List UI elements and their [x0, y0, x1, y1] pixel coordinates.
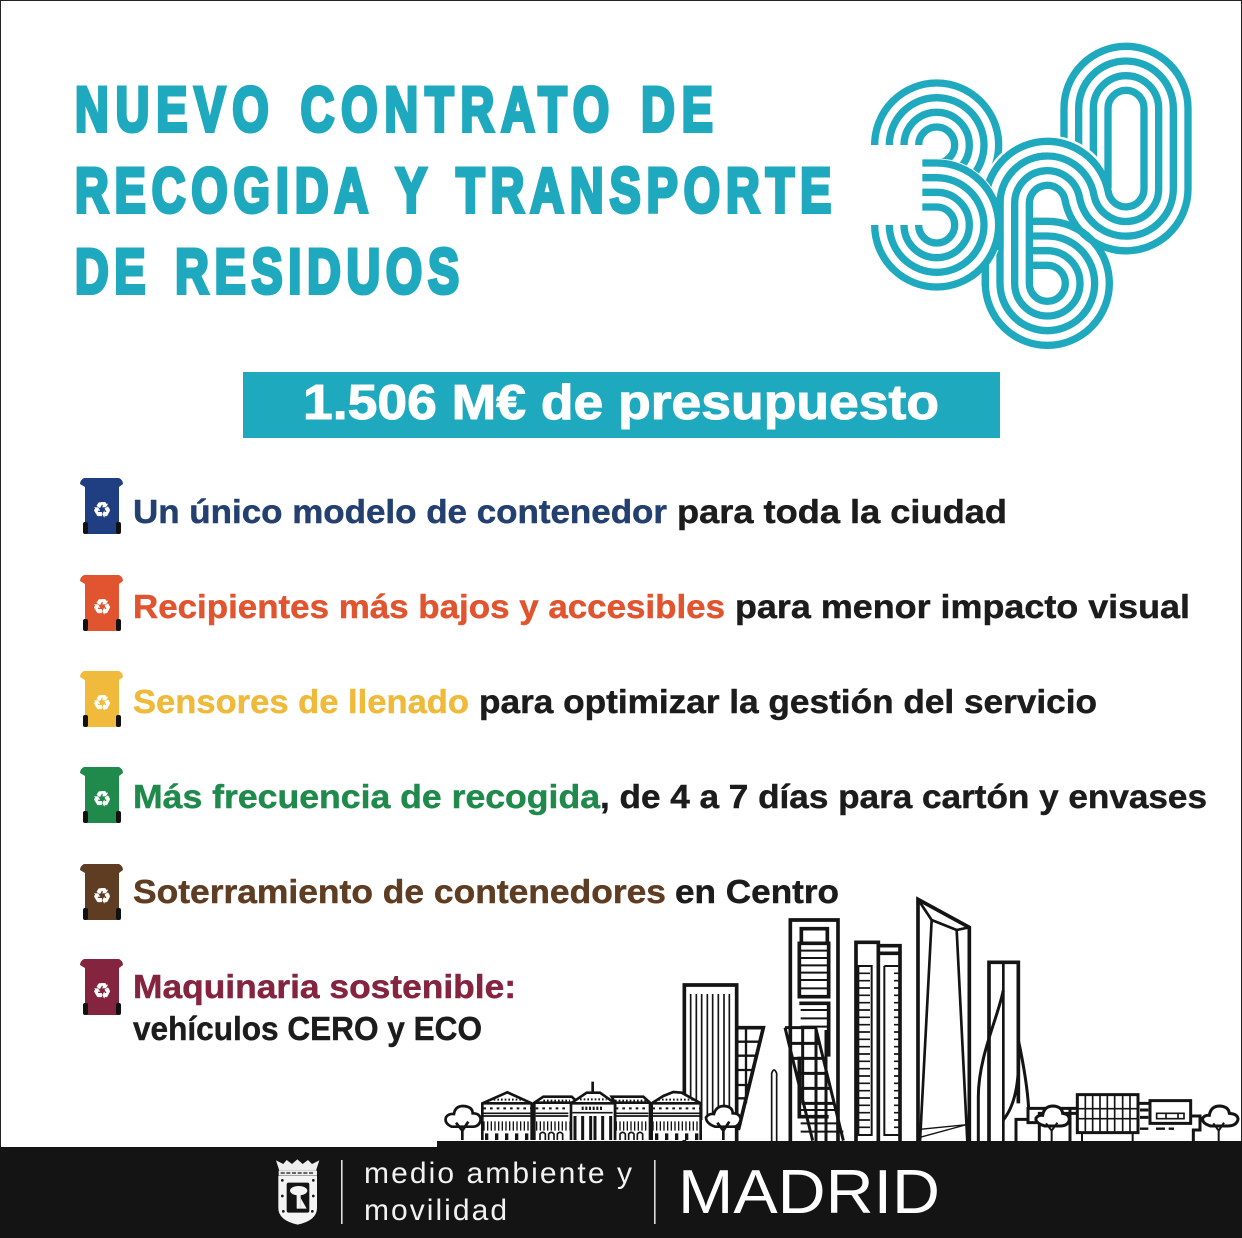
- list item: sustainable machinery: Maquinaria sostenible:: [133, 968, 516, 1005]
- list item: collection frequency: [80, 767, 1207, 823]
- list item: underground containers: en Centro: [675, 873, 839, 910]
- list item: sustainable machinery: vehículos CERO y ECO: [133, 1010, 482, 1047]
- list item: sustainable machinery: [80, 959, 516, 1047]
- skyline: palace: [482, 1082, 701, 1140]
- title: RECOGIDA Y TRANSPORTE: [75, 155, 831, 226]
- list item: underground containers: Soterramiento de contenedores: [133, 873, 666, 910]
- budget banner: 1.506 M€ de presupuesto: [303, 376, 939, 430]
- icon: brown bin: ♻: [93, 884, 111, 908]
- list item: underground containers: [80, 864, 839, 920]
- title: NUEVO CONTRATO DE: [75, 74, 713, 145]
- wordmark: MADRID: MADRID: [678, 1158, 940, 1227]
- icon: blue bin: [80, 478, 123, 534]
- icon: maroon bin: ♻: [93, 979, 111, 1003]
- department name: medio ambiente y: [364, 1157, 632, 1190]
- title: DE RESIDUOS: [75, 236, 459, 307]
- title: [75, 74, 831, 307]
- skyline: low buildings right: [1016, 1095, 1238, 1142]
- icon: yellow bin: [80, 671, 123, 727]
- list item: fill sensors: para optimizar la gestión del servicio: [479, 683, 1097, 720]
- icon: green bin: [80, 767, 123, 823]
- list item: lower accessible containers: para menor impacto visual: [735, 588, 1190, 625]
- list item: single container model: [80, 478, 1007, 534]
- department name: [364, 1157, 632, 1227]
- list item: lower accessible containers: [80, 575, 1190, 631]
- department name: movilidad: [364, 1194, 507, 1227]
- list item: single container model: Un único modelo de contenedor: [133, 493, 667, 530]
- icon: green bin: ♻: [93, 787, 111, 811]
- budget banner: [243, 372, 1000, 438]
- icon: tree left: [446, 1106, 481, 1140]
- footer band: [0, 1141, 1242, 1238]
- logo: 360 made of concentric lines: [870, 46, 1188, 345]
- divider: left: [341, 1160, 343, 1224]
- icon: brown bin: [80, 864, 123, 920]
- list item: fill sensors: Sensores de llenado: [133, 683, 469, 720]
- icon: orange bin: [80, 575, 123, 631]
- list item: lower accessible containers: Recipientes más bajos y accesibles: [133, 588, 725, 625]
- list item: single container model: para toda la ciudad: [677, 493, 1007, 530]
- list item: fill sensors: [80, 671, 1097, 727]
- icon: maroon bin: [80, 959, 123, 1015]
- icon: Madrid crest: [276, 1159, 319, 1225]
- icon: tree centre: [706, 1106, 741, 1140]
- icon: orange bin: ♻: [93, 595, 111, 619]
- list item: collection frequency: Más frecuencia de recogida: [133, 778, 601, 815]
- icon: blue bin: ♻: [93, 498, 111, 522]
- divider: right: [654, 1160, 656, 1224]
- skyline: towers: [684, 899, 1029, 1142]
- list item: collection frequency: , de 4 a 7 días para cartón y envases: [600, 778, 1207, 815]
- icon: yellow bin: ♻: [93, 691, 111, 715]
